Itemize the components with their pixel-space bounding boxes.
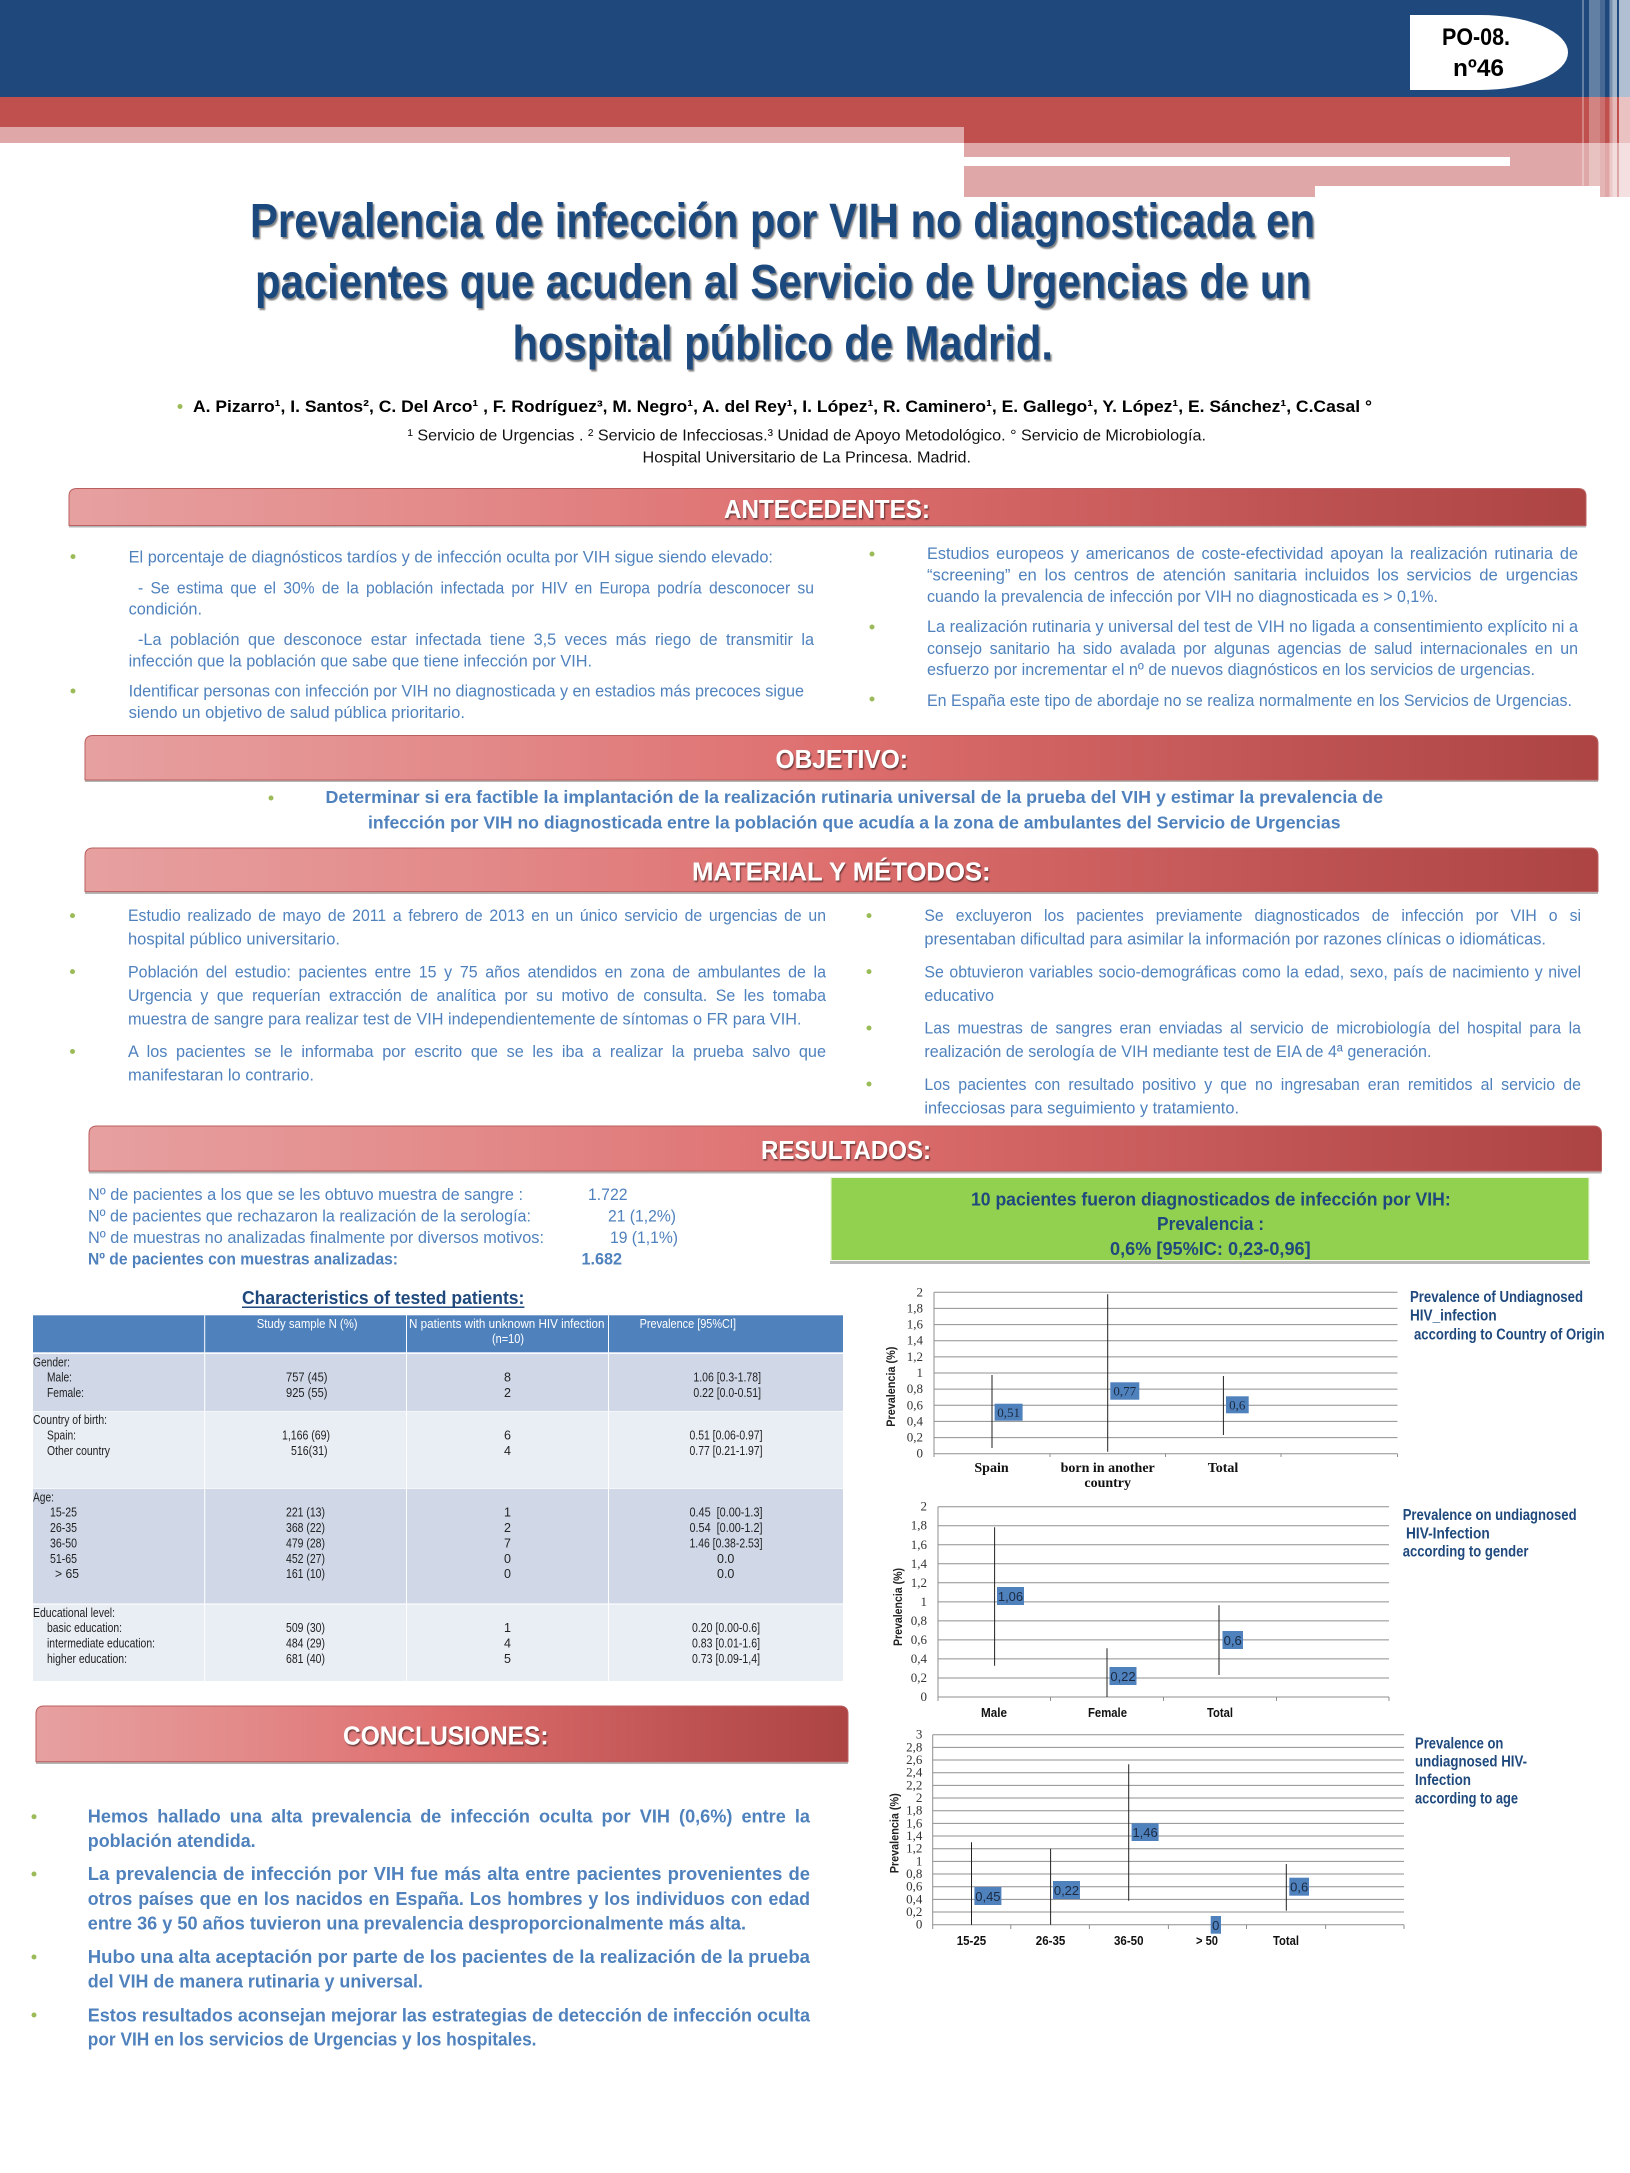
chart: prevalence by age: > 50 <box>1196 1933 1218 1948</box>
chart: prevalence by age: 26-35 <box>1036 1933 1065 1948</box>
chart: prevalence by gender: 0,6 <box>1224 1633 1242 1648</box>
chart: prevalence by gender: 1,4 <box>911 1556 928 1571</box>
table header row <box>33 1315 843 1352</box>
chart: prevalence by gender: Prevalencia (%) <box>893 1568 905 1646</box>
callout: prevalence: Prevalencia : <box>1157 1214 1264 1234</box>
text block: conclusiones <box>32 1806 811 2050</box>
text block: antecedentes right: “screening” en los centros de atención sanitaria incluidos los servicios de urgencias <box>927 567 1578 585</box>
row group: educational level: 509 (30) <box>286 1621 325 1635</box>
table: characteristics of tested patients <box>33 1315 843 1681</box>
chart: prevalence by gender: 0 <box>920 1689 927 1704</box>
chart: prevalence by age: Prevalencia (%) <box>890 1793 902 1873</box>
chart: prevalence by age: 36-50 <box>1114 1933 1144 1948</box>
row group: age: 0.54 [0.00-1.2] <box>690 1521 762 1535</box>
text block: objetivo <box>268 787 1383 832</box>
row group: age: 1.46 [0.38-2.53] <box>690 1536 762 1550</box>
text block: antecedentes right: cuando la prevalencia de infección por VIH no diagnosticada es > 0,1%. <box>927 588 1438 606</box>
results counts <box>88 1186 678 1269</box>
chart caption: country of origin <box>1410 1289 1605 1343</box>
row group: gender: 2 <box>504 1386 511 1400</box>
row group: age: 221 (13) <box>286 1506 325 1520</box>
chart: prevalence by age: 15-25 <box>957 1933 986 1948</box>
chart: prevalence by gender: 1,06 <box>998 1589 1023 1604</box>
row group: gender: 1.06 [0.3-1.78] <box>693 1371 761 1385</box>
text block: objetivo: Determinar si era factible la implantación de la realización rutinaria universal de la prueba del VIH y estimar la prevalencia de <box>326 787 1383 807</box>
chart: prevalence by country of origin: born in another <box>1061 1461 1155 1476</box>
row group: age: 368 (22) <box>286 1521 325 1535</box>
heading bar: objetivo: OBJETIVO: <box>776 744 908 774</box>
chart: prevalence by country of origin: 0,6 <box>907 1397 924 1412</box>
table header row: (n=10) <box>492 1332 524 1346</box>
chart: prevalence by country of origin: 0,8 <box>907 1381 923 1396</box>
title: pacientes que acuden al Servicio de Urgencias de un <box>255 256 1311 309</box>
table header row: N patients with unknown HIV infection <box>409 1317 605 1331</box>
results counts: 21 (1,2%) <box>608 1208 676 1226</box>
row group: educational level: 0.73 [0.09-1,4] <box>692 1652 760 1666</box>
chart caption: gender: Prevalence on undiagnosed <box>1403 1507 1577 1524</box>
text block: métodos right: Se excluyeron los pacientes previamente diagnosticados de infección por VIH o si <box>924 907 1581 925</box>
chart: prevalence by age: 0,2 <box>906 1904 922 1919</box>
affiliations <box>408 428 1206 466</box>
row group: age: > 65 <box>55 1567 79 1581</box>
chart: prevalence by country of origin: country <box>1084 1476 1131 1491</box>
heading bar: conclusiones <box>36 1706 848 1764</box>
text block: antecedentes left: condición. <box>129 601 202 619</box>
chart: prevalence by age: 2 <box>916 1790 922 1805</box>
text block: métodos right: infecciosas para seguimiento y tratamiento. <box>924 1099 1239 1117</box>
chart: prevalence by gender: 0,2 <box>911 1670 927 1685</box>
heading bar: resultados <box>89 1126 1602 1174</box>
results counts: Nº de muestras no analizadas finalmente por diversos motivos: <box>88 1229 544 1247</box>
row group: country of birth: 6 <box>504 1428 511 1442</box>
chart: prevalence by country of origin: 1 <box>916 1365 923 1380</box>
row group: age: 0.0 <box>717 1567 734 1581</box>
chart: prevalence by gender: Total <box>1207 1705 1233 1720</box>
text block: conclusiones: por VIH en los servicios de Urgencias y los hospitales. <box>88 2030 537 2050</box>
heading bar: antecedentes: ANTECEDENTES: <box>724 494 930 524</box>
chart: prevalence by country of origin: 1,4 <box>907 1333 924 1348</box>
chart caption: age <box>1415 1735 1527 1807</box>
chart: prevalence by age: 2,8 <box>906 1739 922 1754</box>
chart: prevalence by country of origin: 0,77 <box>1113 1384 1137 1399</box>
affiliations: ¹ Servicio de Urgencias . ² Servicio de Infecciosas.³ Unidad de Apoyo Metodológico. ° Servicio de Microbiología. <box>408 428 1206 445</box>
row group: age: 36-50 <box>50 1536 77 1550</box>
text block: antecedentes right: esfuerzo por incrementar el nº de nuevos diagnósticos en los servicios de urgencias. <box>927 661 1535 679</box>
chart: prevalence by gender: 0,4 <box>911 1651 928 1666</box>
chart: prevalence by age: 0,4 <box>906 1891 923 1906</box>
row group: age: 2 <box>504 1521 511 1535</box>
chart: prevalence by age: 1,6 <box>906 1815 923 1830</box>
chart: prevalence by gender: 0,8 <box>911 1613 927 1628</box>
chart: prevalence by gender: 1,2 <box>911 1575 927 1590</box>
row group: age: Age: <box>33 1490 54 1504</box>
chart: prevalence by age: Total <box>1273 1933 1299 1948</box>
row group: educational level: intermediate education: <box>47 1636 155 1650</box>
heading bar: objetivo <box>85 736 1598 782</box>
poster code badge: PO-08. <box>1442 24 1510 51</box>
chart: prevalence by age: 2,6 <box>906 1752 923 1767</box>
row group: age: 161 (10) <box>286 1567 325 1581</box>
chart: prevalence by age: 2,4 <box>906 1765 923 1780</box>
chart: prevalence by age: 0,8 <box>906 1866 922 1881</box>
chart: prevalence by country of origin: 0,4 <box>907 1413 924 1428</box>
poster code badge <box>1410 15 1568 90</box>
row group: educational level: 5 <box>504 1652 511 1666</box>
chart: prevalence by country of origin: 0 <box>916 1446 923 1461</box>
chart caption: age: undiagnosed HIV- <box>1415 1754 1527 1771</box>
text block: métodos left: Estudio realizado de mayo de 2011 a febrero de 2013 en un único servicio de urgencias de un <box>128 907 826 925</box>
chart caption: gender <box>1403 1507 1577 1561</box>
row group: educational level: 681 (40) <box>286 1652 325 1666</box>
chart: prevalence by age: 1,8 <box>906 1803 922 1818</box>
row group: age: 0.0 <box>717 1552 734 1566</box>
chart caption: age: according to age <box>1415 1790 1518 1807</box>
text block: antecedentes right: consejo sanitario ha sido avalada por algunas agencias de salud internacionales en un <box>927 640 1578 658</box>
poster code badge: nº46 <box>1453 55 1504 82</box>
title <box>250 195 1315 370</box>
chart: prevalence by country of origin: 1,6 <box>907 1317 924 1332</box>
text block: métodos left: Urgencia y que requerían extracción de analítica por su motivo de consulta. Se les tomaba <box>128 987 827 1005</box>
row group: gender: Male: <box>47 1371 72 1385</box>
row group: age: 479 (28) <box>286 1536 325 1550</box>
row group: age: 0.45 [0.00-1.3] <box>690 1506 762 1520</box>
text block: antecedentes left: siendo un objetivo de salud pública prioritario. <box>129 704 465 722</box>
row group: educational level: Educational level: <box>33 1606 115 1620</box>
chart: prevalence by gender: Female <box>1088 1705 1127 1720</box>
chart: prevalence by age: 0,45 <box>975 1889 1001 1904</box>
text block: métodos right: Las muestras de sangres eran enviadas al servicio de microbiología del hospital para la <box>924 1020 1582 1038</box>
text block: antecedentes left: -La población que desconoce estar infectada tiene 3,5 veces más riego de transmitir la <box>138 631 815 649</box>
text block: métodos right: presentaban dificultad para asimilar la información por razones clínicas o idiomáticas. <box>924 931 1546 949</box>
chart: prevalence by age <box>890 1727 1404 1948</box>
row group: age: 452 (27) <box>286 1552 325 1566</box>
row group: country of birth: 1,166 (69) <box>282 1428 330 1442</box>
chart: prevalence by country of origin: 1,8 <box>907 1300 923 1315</box>
table header row: Study sample N (%) <box>257 1317 358 1331</box>
results counts: 1.682 <box>582 1251 622 1269</box>
text block: métodos right: educativo <box>924 987 994 1005</box>
chart caption: country of origin: Prevalence of Undiagnosed <box>1410 1289 1583 1306</box>
text block: antecedentes right: La realización rutinaria y universal del test de VIH no ligada a consentimiento explícito ni a <box>927 618 1579 636</box>
chart caption: gender: according to gender <box>1403 1544 1528 1561</box>
affiliations: Hospital Universitario de La Princesa. Madrid. <box>642 449 971 466</box>
chart: prevalence by age: 0,22 <box>1054 1883 1079 1898</box>
text block: conclusiones: otros países que en los nacidos en España. Los hombres y los individuos con edad <box>88 1889 810 1909</box>
text block: conclusiones: Estos resultados aconsejan mejorar las estrategias de detección de infección oculta <box>88 2005 811 2025</box>
row group: gender: 925 (55) <box>286 1386 328 1400</box>
row group: country of birth: 516(31) <box>291 1444 328 1458</box>
chart: prevalence by gender: 2 <box>920 1499 927 1514</box>
row group: educational level: basic education: <box>47 1621 122 1635</box>
chart: prevalence by gender: 1,6 <box>911 1537 928 1552</box>
row group: educational level: 4 <box>504 1636 511 1650</box>
row group: age: 15-25 <box>50 1506 77 1520</box>
chart: prevalence by gender: 0,22 <box>1110 1669 1136 1684</box>
row group: educational level <box>33 1606 760 1666</box>
chart: prevalence by age: 1,2 <box>906 1841 922 1856</box>
chart: prevalence by gender: 0,6 <box>911 1632 928 1647</box>
text block: métodos right <box>866 907 1582 1117</box>
row group: gender: 8 <box>504 1371 511 1385</box>
heading bar: antecedentes <box>69 488 1586 528</box>
chart: prevalence by age: 1,4 <box>906 1828 923 1843</box>
chart: prevalence by country of origin: 0,2 <box>907 1430 923 1445</box>
chart: prevalence by age: 3 <box>916 1727 922 1742</box>
text block: métodos left: manifestaran lo contrario. <box>128 1067 314 1085</box>
text block: conclusiones: Hubo una alta aceptación por parte de los pacientes de la realización de la prueba <box>88 1947 811 1967</box>
text block: métodos left <box>70 907 827 1085</box>
row group: age: 51-65 <box>50 1552 77 1566</box>
header banner <box>0 0 1630 197</box>
row group: gender: Female: <box>47 1386 84 1400</box>
row group: age <box>33 1490 762 1581</box>
row group: gender: 757 (45) <box>286 1371 328 1385</box>
row group: educational level: 0.83 [0.01-1.6] <box>692 1636 760 1650</box>
row group: educational level: 0.20 [0.00-0.6] <box>692 1621 760 1635</box>
table heading: Characteristics of tested patients: <box>242 1287 524 1308</box>
heading bar: resultados: RESULTADOS: <box>761 1135 931 1165</box>
row group: country of birth: Other country <box>47 1444 111 1458</box>
text block: antecedentes right: En España este tipo de abordaje no se realiza normalmente en los Servicios de Urgencias. <box>927 692 1572 710</box>
results counts: 1.722 <box>588 1186 628 1204</box>
row group: educational level: higher education: <box>47 1652 127 1666</box>
row group: country of birth <box>33 1413 762 1458</box>
row group: age: 0 <box>504 1567 511 1581</box>
chart caption: gender: HIV-Infection <box>1406 1525 1490 1542</box>
row group: age: 0 <box>504 1552 511 1566</box>
callout: prevalence <box>830 1177 1590 1264</box>
row group: country of birth: 4 <box>504 1444 511 1458</box>
text block: conclusiones: población atendida. <box>88 1831 256 1851</box>
text block: métodos right: Los pacientes con resultado positivo y que no ingresaban eran remitidos al servicio de <box>924 1076 1581 1094</box>
row group: educational level: 484 (29) <box>286 1636 325 1650</box>
chart caption: age: Infection <box>1415 1772 1471 1789</box>
text block: antecedentes right <box>870 545 1579 710</box>
text block: métodos right: Se obtuvieron variables socio-demográficas como la edad, sexo, país de nacimiento y nivel <box>924 964 1581 982</box>
row group: country of birth: 0.51 [0.06-0.97] <box>690 1428 762 1442</box>
text block: conclusiones: La prevalencia de infección por VIH fue más alta entre pacientes provenientes de <box>88 1864 810 1884</box>
chart: prevalence by country of origin: Total <box>1208 1461 1238 1476</box>
row group: gender: Gender: <box>33 1355 70 1369</box>
text block: objetivo: infección por VIH no diagnosticada entre la población que acudía a la zona de ambulantes del Servicio de Urgencias <box>368 812 1341 832</box>
text block: métodos right: realización de serología de VIH mediante test de EIA de 4ª generación. <box>924 1043 1432 1061</box>
text block: métodos left: hospital público universitario. <box>128 931 340 949</box>
row group: country of birth: Country of birth: <box>33 1413 107 1427</box>
text block: conclusiones: Hemos hallado una alta prevalencia de infección oculta por VIH (0,6%) entre la <box>88 1806 811 1826</box>
text block: antecedentes right: Estudios europeos y americanos de coste-efectividad apoyan la realización rutinaria de <box>927 545 1578 563</box>
chart: prevalence by country of origin: Spain <box>974 1461 1009 1476</box>
row group: country of birth: Spain: <box>47 1428 76 1442</box>
chart: prevalence by gender: Male <box>981 1705 1007 1720</box>
chart caption: country of origin: HIV_infection <box>1410 1308 1497 1325</box>
results counts: Nº de pacientes que rechazaron la realización de la serología: <box>88 1208 531 1226</box>
callout: prevalence: 10 pacientes fueron diagnosticados de infección por VIH: <box>971 1190 1451 1210</box>
title: Prevalencia de infección por VIH no diagnosticada en <box>250 195 1315 248</box>
text block: conclusiones: entre 36 y 50 años tuvieron una prevalencia desproporcionalmente más alta. <box>88 1914 746 1934</box>
text block: antecedentes left: Identificar personas con infección por VIH no diagnosticada y en estadios más precoces sigue <box>129 683 804 701</box>
chart: prevalence by gender: 1,8 <box>911 1518 927 1533</box>
text block: conclusiones: del VIH de manera rutinaria y universal. <box>88 1972 423 1992</box>
results counts: Nº de pacientes a los que se les obtuvo muestra de sangre : <box>88 1186 523 1204</box>
chart: prevalence by country of origin: 0,51 <box>997 1405 1020 1420</box>
text block: antecedentes left: El porcentaje de diagnósticos tardíos y de infección oculta por VIH sigue siendo elevado: <box>129 548 773 566</box>
chart: prevalence by country of origin: 1,2 <box>907 1349 923 1364</box>
chart: prevalence by country of origin: Prevalencia (%) <box>886 1347 898 1427</box>
chart: prevalence by country of origin: 2 <box>916 1284 923 1299</box>
text block: antecedentes left: infección que la población que sabe que tiene infección por VIH. <box>129 652 592 670</box>
row group: educational level: 1 <box>504 1621 511 1635</box>
chart: prevalence by age: 2,2 <box>906 1777 922 1792</box>
row group: age: 1 <box>504 1506 511 1520</box>
chart caption: age: Prevalence on <box>1415 1735 1503 1752</box>
title: hospital público de Madrid. <box>512 318 1053 370</box>
authors: A. Pizarro¹, I. Santos², C. Del Arco¹ , F. Rodríguez³, M. Negro¹, A. del Rey¹, I. López¹, R. Caminero¹, E. Gallego¹, Y. López¹, E. Sánchez¹, C.Casal ° <box>193 397 1372 416</box>
chart: prevalence by age: 0 <box>1212 1918 1219 1933</box>
table header row: Prevalence [95%CI] <box>640 1317 736 1331</box>
row group: gender <box>33 1355 761 1400</box>
text block: métodos left: Población del estudio: pacientes entre 15 y 75 años atendidos en zona de ambulantes de la <box>128 964 827 982</box>
heading bar: material y métodos <box>85 848 1598 894</box>
results counts: Nº de pacientes con muestras analizadas: <box>88 1251 398 1269</box>
text block: antecedentes left: - Se estima que el 30% de la población infectada por HIV en Europa podría desconocer su <box>138 580 814 598</box>
results counts: 19 (1,1%) <box>610 1229 678 1247</box>
callout: prevalence: 0,6% [95%IC: 0,23-0,96] <box>1110 1239 1311 1259</box>
heading bar: material y métodos: MATERIAL Y MÉTODOS: <box>692 857 991 887</box>
row group: country of birth: 0.77 [0.21-1.97] <box>690 1444 762 1458</box>
chart: prevalence by country of origin <box>886 1284 1398 1491</box>
text block: antecedentes left <box>70 548 815 722</box>
heading bar: conclusiones: CONCLUSIONES: <box>343 1720 548 1750</box>
text block: métodos left: muestra de sangre para realizar test de VIH independientemente de síntomas o FR para VIH. <box>128 1011 802 1029</box>
chart: prevalence by age: 0,6 <box>906 1879 923 1894</box>
row group: age: 26-35 <box>50 1521 77 1535</box>
chart: prevalence by age: 0,6 <box>1290 1880 1308 1895</box>
chart: prevalence by country of origin: 0,6 <box>1229 1398 1246 1412</box>
text block: métodos left: A los pacientes se le informaba por escrito que se les iba a realizar la prueba salvo que <box>128 1043 826 1061</box>
row group: age: 7 <box>504 1536 511 1550</box>
chart: prevalence by gender <box>893 1499 1389 1720</box>
chart: prevalence by age: 1 <box>916 1853 922 1868</box>
chart: prevalence by age: 0 <box>916 1917 922 1932</box>
chart: prevalence by age: 1,46 <box>1132 1825 1158 1840</box>
chart: prevalence by gender: 1 <box>920 1594 927 1609</box>
row group: gender: 0.22 [0.0-0.51] <box>693 1386 761 1400</box>
